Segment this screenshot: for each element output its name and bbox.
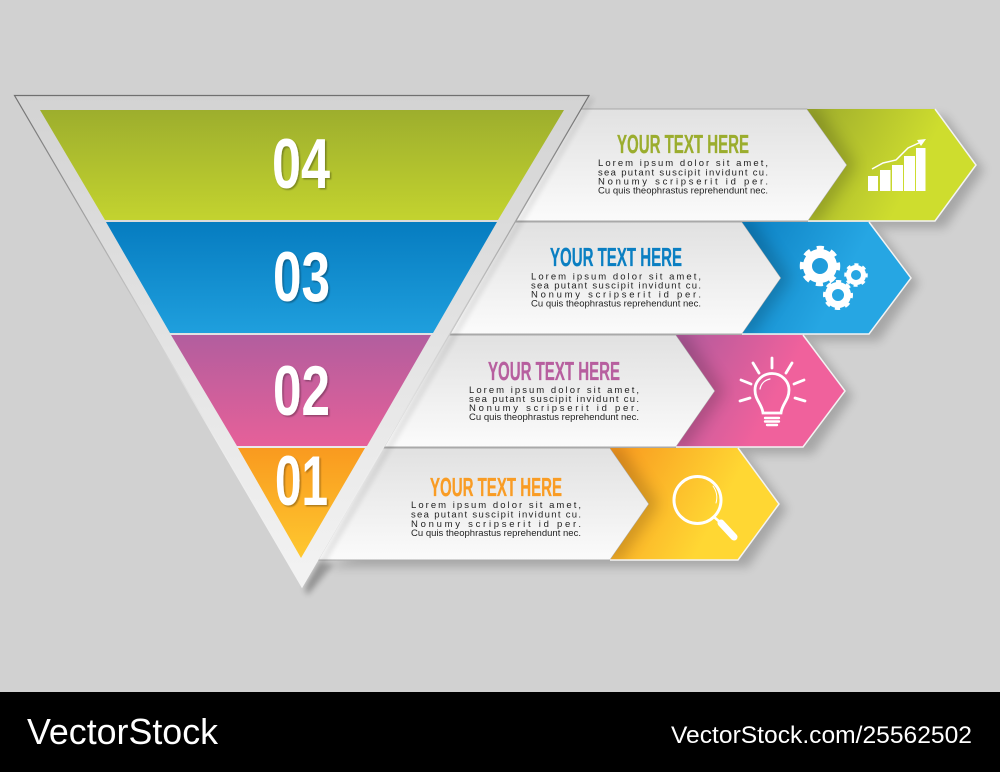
row 04 notch shadow: [807, 109, 847, 221]
row 01 coloured arrow: [610, 448, 779, 560]
text block row 04: Nonumy scripserit id per.: [598, 176, 768, 187]
row 02 arrow edge: [676, 335, 845, 447]
text block row 03: sea putant suscipit invidunt cu.: [531, 281, 701, 292]
row 01 white panel: [318, 448, 649, 560]
band 01: [238, 448, 365, 558]
row 03 notch shadow: [742, 222, 781, 334]
text block row 01: Lorem ipsum dolor sit amet,: [411, 500, 581, 511]
number 03: 03: [273, 237, 330, 316]
panel: funnel frame: [14, 96, 589, 587]
band 04: [40, 110, 564, 220]
row 02 white panel: [384, 335, 715, 447]
panel: arrow shadows: [328, 116, 984, 567]
funnel tip shadow: [304, 562, 334, 595]
text block row 01: sea putant suscipit invidunt cu.: [411, 510, 581, 520]
number 04: 04: [272, 124, 330, 203]
panel: row 04 arrow: [516, 109, 976, 221]
text block row 02: sea putant suscipit invidunt cu.: [469, 394, 639, 405]
row 04 white panel: [516, 109, 847, 221]
number 02: 02: [273, 351, 330, 430]
text block row 04: Cu quis theophrastus reprehendunt nec.: [598, 185, 768, 196]
row 01 notch shadow: [610, 448, 649, 560]
row 01 arrow edge: [610, 448, 779, 560]
number 01: 01: [275, 441, 328, 520]
text block row 03: [531, 271, 701, 310]
heading row 01: YOUR TEXT HERE: [430, 472, 562, 502]
text block row 02: Cu quis theophrastus reprehendunt nec.: [469, 412, 639, 423]
text block row 01: Cu quis theophrastus reprehendunt nec.: [411, 528, 581, 539]
text block row 04: sea putant suscipit invidunt cu.: [598, 167, 768, 178]
panel: row 01 arrow: [318, 448, 779, 560]
row 02 coloured arrow: [676, 335, 845, 447]
row 03 coloured arrow: [742, 222, 911, 334]
text block row 04: [598, 158, 768, 196]
row 04 arrow edge: [808, 109, 976, 221]
text block row 03: Lorem ipsum dolor sit amet,: [531, 271, 701, 282]
text block row 03: Nonumy scripserit id per.: [531, 290, 701, 301]
icon: gears: [802, 248, 866, 308]
row 03 arrow edge: [742, 222, 911, 334]
row 02 notch shadow: [676, 335, 715, 447]
icon: growth chart: [868, 139, 926, 191]
text block row 02: Nonumy scripserit id per.: [469, 403, 639, 414]
row 04 coloured arrow: [807, 109, 976, 221]
footer image id: VectorStock.com/25562502: [671, 722, 972, 749]
band 02: [171, 335, 431, 446]
footer bar: [0, 692, 1000, 772]
panel: funnel bands: [40, 110, 564, 558]
row 03 white panel: [450, 222, 781, 334]
text block row 02: [469, 385, 639, 423]
icon: light bulb: [740, 358, 805, 425]
text block row 03: Cu quis theophrastus reprehendunt nec.: [531, 299, 701, 310]
text block row 01: Nonumy scripserit id per.: [411, 519, 581, 530]
funnel edge shadow: [308, 98, 592, 587]
band 03: [106, 222, 497, 333]
text block row 02: Lorem ipsum dolor sit amet,: [469, 385, 639, 396]
heading row 03: YOUR TEXT HERE: [550, 242, 682, 272]
panel: row 03 arrow: [450, 222, 911, 334]
text block row 04: Lorem ipsum dolor sit amet,: [598, 158, 768, 169]
footer logo text: VectorStock: [27, 711, 219, 752]
panel: row 02 arrow: [384, 335, 845, 447]
heading row 02: YOUR TEXT HERE: [488, 356, 620, 386]
text block row 01: [411, 500, 581, 539]
icon: magnifier: [674, 476, 734, 537]
heading row 04: YOUR TEXT HERE: [617, 129, 749, 159]
